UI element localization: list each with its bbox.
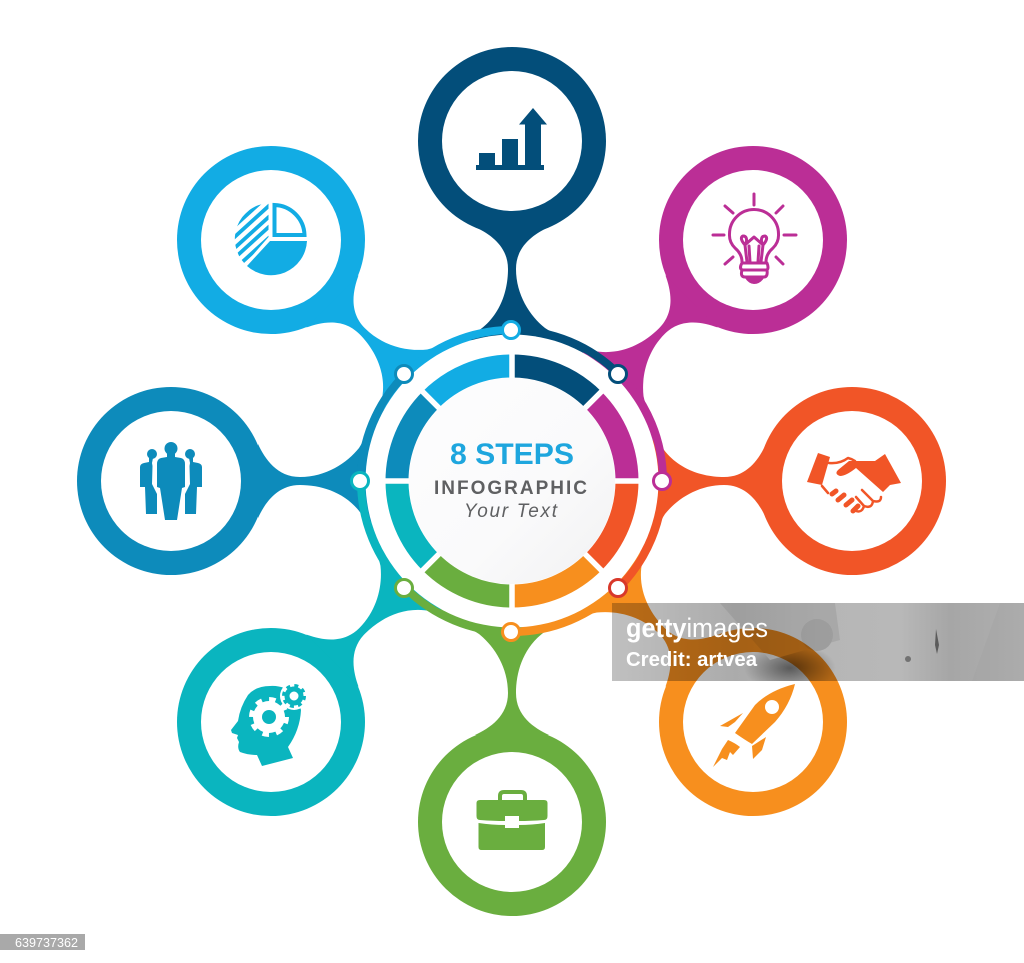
icon: lightbulb base (745, 278, 764, 284)
icon: briefcase (476, 790, 548, 850)
icon: handshake (807, 453, 901, 511)
connector dots (352, 322, 670, 640)
segmented ring (381, 350, 643, 612)
hub white backing (366, 334, 658, 628)
watermark logo: gettyimages (626, 613, 768, 643)
tagline: your text: Your Text (464, 501, 558, 522)
image id tag (0, 934, 85, 950)
node: blue team (77, 381, 412, 575)
node: purple lightbulb (549, 146, 847, 481)
icon: rising bar chart (476, 108, 547, 170)
icon: team of people (140, 442, 202, 520)
outer connecting arcs (361, 330, 663, 632)
node: orange rocket (512, 518, 847, 816)
subheading: infographic: INFOGRAPHIC (434, 478, 587, 499)
icon: rocket (713, 684, 795, 767)
heading: 8 steps: 8 STEPS (450, 438, 574, 471)
watermark band (612, 603, 1024, 681)
image id tag: 639737362 (15, 936, 78, 950)
node: light blue pie chart (177, 146, 472, 410)
watermark shading (720, 603, 939, 681)
node: dark blue growth chart (418, 47, 612, 381)
icon: pie chart (234, 202, 307, 276)
central hub (352, 322, 670, 640)
node: green briefcase (412, 581, 606, 916)
icon: head with gears (231, 682, 308, 766)
node: red-orange handshake (612, 387, 946, 581)
watermark credit: Credit: artvea (626, 649, 758, 671)
node: teal head with gears (177, 481, 475, 816)
icon: lightbulb (713, 194, 796, 277)
hub inner disc (409, 378, 615, 584)
